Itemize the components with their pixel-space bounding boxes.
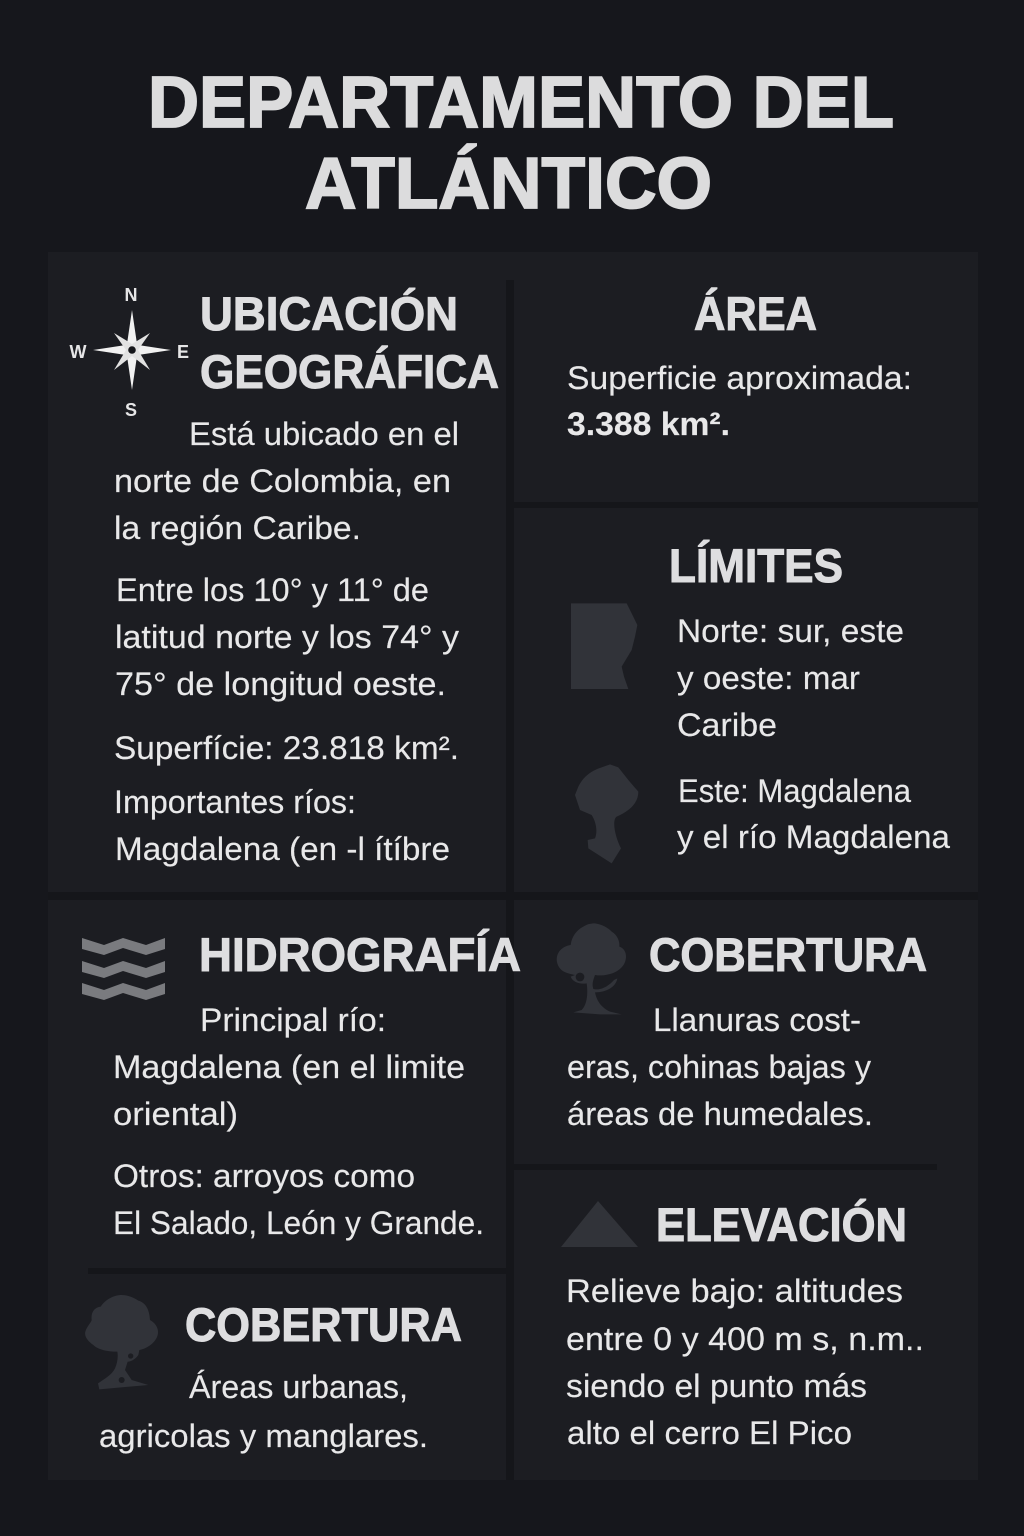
- panel: límites: [514, 508, 978, 892]
- text: main river: Magdalena (en el limite: [113, 1049, 465, 1085]
- icon: tree: [557, 923, 626, 1014]
- text: other streams: [113, 1158, 484, 1241]
- text: area value: 3.388 km².: [567, 406, 730, 442]
- text: surface: Superfície: 23.818 km².: [114, 730, 459, 766]
- text: north limit: Caribe: [677, 707, 777, 743]
- panel: área: [514, 252, 978, 502]
- panel: cobertura right: [514, 900, 978, 1164]
- title: ATLÁNTICO: [305, 144, 712, 224]
- text: other streams: Otros: arroyos como: [113, 1158, 415, 1194]
- heading: cobertura right: COBERTURA: [649, 928, 927, 981]
- text: relief: siendo el punto más: [566, 1368, 867, 1404]
- panel: cobertura left: [48, 1274, 506, 1480]
- icon: mountain triangle: [561, 1201, 638, 1247]
- panel: elevación: [514, 1170, 978, 1480]
- text: east limit: Este: Magdalena: [678, 773, 911, 809]
- text: location: Está ubicado en el: [189, 416, 459, 452]
- text: east limit: y el río Magdalena: [677, 819, 950, 855]
- heading: ubicación geográfica: UBICACIÓN: [200, 287, 458, 340]
- icon: water waves: [82, 938, 165, 1000]
- text: east limit: [677, 773, 950, 855]
- text: other streams: El Salado, León y Grande.: [113, 1205, 484, 1241]
- text: location: [114, 416, 459, 546]
- text: area value: Superficie aproximada:: [567, 360, 912, 396]
- text: relief: [566, 1273, 924, 1451]
- icon: map silhouette east: [575, 764, 638, 863]
- text: coordinates: 75° de longitud oeste.: [115, 666, 446, 702]
- text: coordinates: latitud norte y los 74° y: [115, 619, 459, 655]
- icon: compass rose: S: [125, 400, 137, 420]
- heading: ubicación geográfica: GEOGRÁFICA: [200, 345, 499, 398]
- text: area value: [567, 360, 912, 442]
- icon: compass rose: N: [124, 285, 138, 305]
- icon: tree: [85, 1295, 158, 1389]
- heading: hidrografía: HIDROGRAFÍA: [199, 928, 521, 981]
- text: relief: Relieve bajo: altitudes: [566, 1273, 903, 1309]
- text: land cover right: [567, 1002, 873, 1132]
- icon: compass rose: E: [177, 342, 189, 362]
- text: rivers: Magdalena (en -l ítíbre: [115, 831, 450, 867]
- heading: ubicación geográfica: [200, 287, 499, 398]
- text: location: norte de Colombia, en: [114, 463, 451, 499]
- text: main river: oriental): [113, 1096, 238, 1132]
- text: rivers: Importantes ríos:: [114, 784, 356, 820]
- text: land cover right: áreas de humedales.: [567, 1096, 873, 1132]
- panel: hidrografía: [48, 900, 521, 1268]
- text: main river: Principal río:: [200, 1002, 386, 1038]
- text: relief: entre 0 y 400 m s, n.m..: [566, 1321, 924, 1357]
- icon: map silhouette north: [571, 603, 637, 689]
- icon: compass rose: [70, 285, 189, 420]
- title: DEPARTAMENTO DEL: [148, 63, 894, 143]
- text: relief: alto el cerro El Pico: [567, 1415, 852, 1451]
- text: north limit: [677, 613, 904, 743]
- text: coordinates: Entre los 10° y 11° de: [116, 572, 429, 608]
- title: [148, 63, 894, 224]
- text: land cover left: [99, 1369, 428, 1454]
- icon: compass rose: W: [70, 342, 86, 362]
- text: main river: [113, 1002, 465, 1132]
- heading: cobertura left: COBERTURA: [185, 1298, 462, 1351]
- text: coordinates: [115, 572, 459, 702]
- heading: elevación: ELEVACIÓN: [656, 1198, 907, 1251]
- heading: área: ÁREA: [694, 287, 817, 340]
- text: land cover right: Llanuras cost-: [653, 1002, 861, 1038]
- panel: ubicación geográfica: [48, 252, 506, 892]
- text: north limit: y oeste: mar: [677, 660, 860, 696]
- text: rivers: [114, 784, 450, 867]
- text: location: la región Caribe.: [114, 510, 361, 546]
- text: north limit: Norte: sur, este: [677, 613, 904, 649]
- text: land cover right: eras, cohinas bajas y: [567, 1049, 871, 1085]
- text: land cover left: agricolas y manglares.: [99, 1418, 428, 1454]
- text: land cover left: Áreas urbanas,: [189, 1369, 408, 1405]
- heading: límites: LÍMITES: [669, 539, 843, 592]
